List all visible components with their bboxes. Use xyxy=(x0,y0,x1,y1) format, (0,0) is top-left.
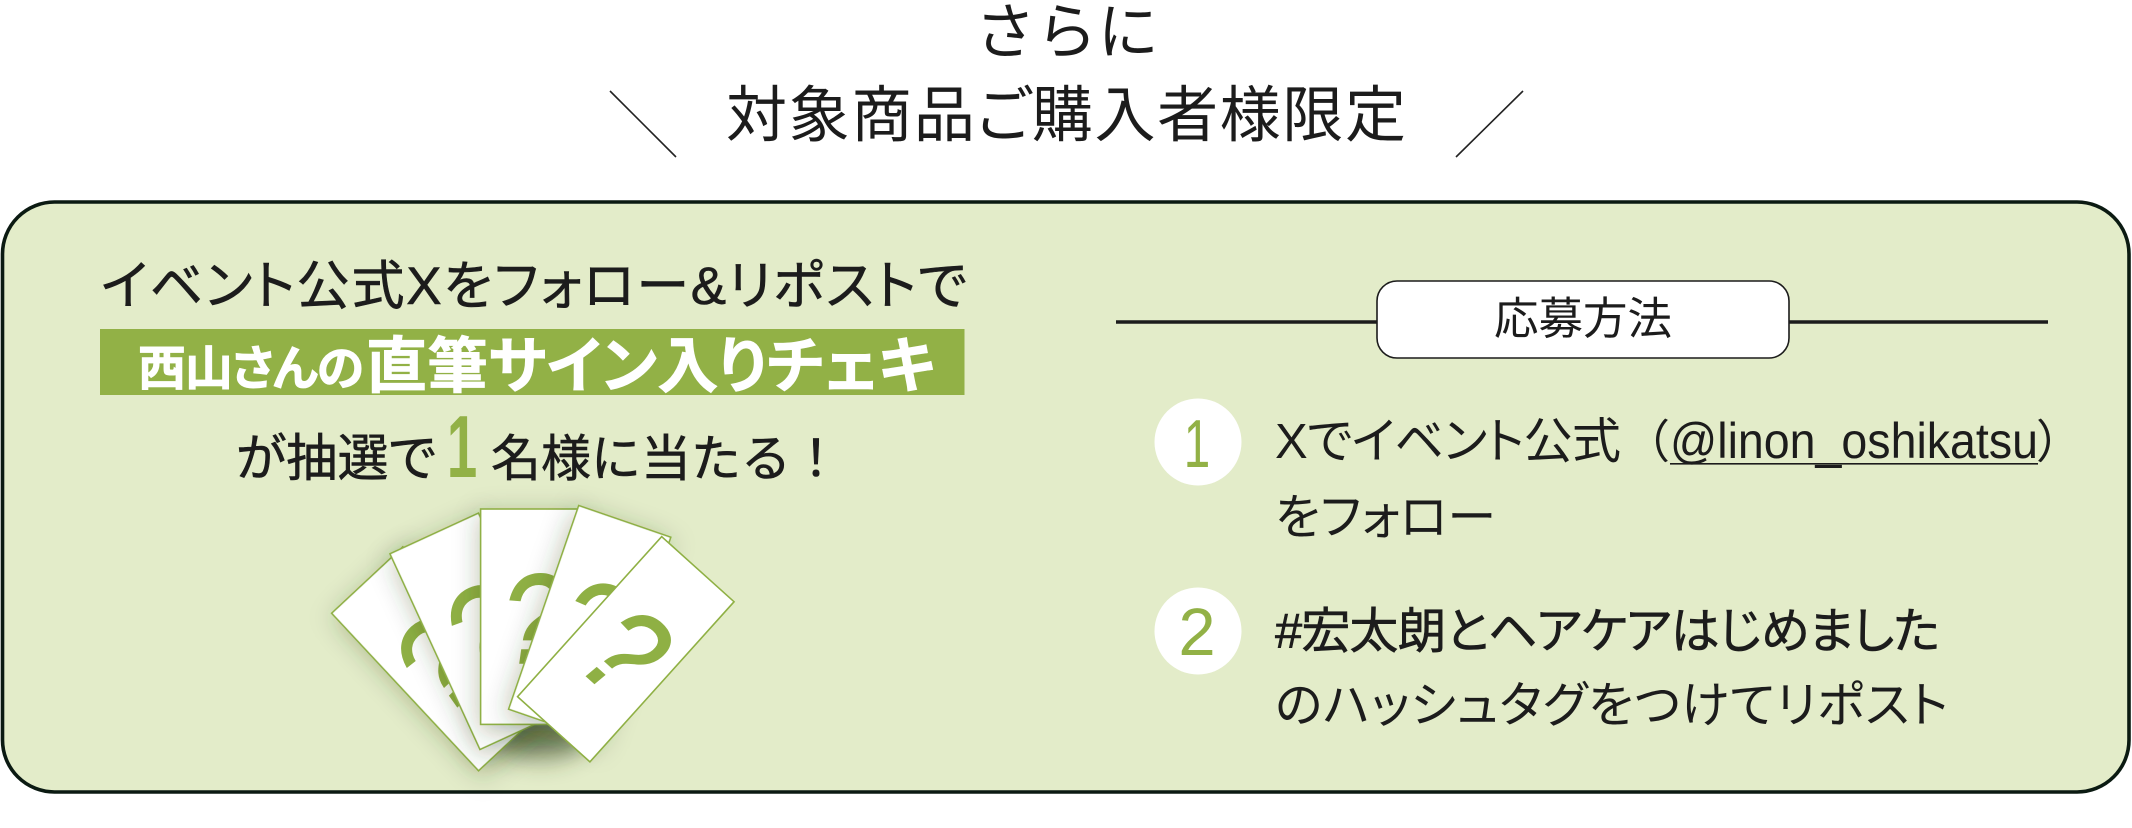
card 4 xyxy=(509,506,671,741)
step 1 number badge xyxy=(1154,398,1242,486)
title: さらに 対象商品ご購入者様限定: さらに xyxy=(975,0,1159,66)
step 1 text: ） xyxy=(2036,416,2082,468)
title: さらに 対象商品ご購入者様限定: 対象商品ご購入者様限定 xyxy=(726,81,1406,149)
card 3: ? xyxy=(493,549,573,691)
text: one winner by lottery: 1 xyxy=(447,398,477,496)
step 1 text xyxy=(1275,413,2082,545)
card 3 xyxy=(481,509,578,724)
title: さらに 対象商品ご購入者様限定 xyxy=(610,0,1523,157)
card 1: ? xyxy=(375,587,500,745)
text: one winner by lottery: が抽選で xyxy=(236,430,436,487)
card 5: ? xyxy=(548,587,702,719)
step 1 text: Xでイベント公式 xyxy=(1275,415,1621,469)
step 1 text: をフォロー xyxy=(1275,491,1496,545)
card 1 xyxy=(332,547,550,771)
step 1 text: @linon_oshikatsu xyxy=(1670,413,2038,469)
card 2 xyxy=(390,513,568,749)
step 2 number badge: 2 xyxy=(1178,595,1216,670)
step 1 text: （ xyxy=(1624,416,1670,468)
step 2 number badge xyxy=(1154,588,1242,674)
card 2: ? xyxy=(434,553,529,715)
step 2 text xyxy=(1275,605,1948,733)
step 2 text: のハッシュタグをつけてリポスト xyxy=(1275,679,1948,733)
banner: signed cheki prize xyxy=(100,329,964,400)
banner: signed cheki prize: 直筆サイン入りチェキ xyxy=(366,332,934,400)
step 1 number badge: 1 xyxy=(1184,407,1210,482)
section header: how to apply xyxy=(1116,281,2048,358)
step 2 text: #宏太朗とヘアケアはじめました xyxy=(1275,605,1940,659)
text: one winner by lottery xyxy=(236,398,841,496)
panel: campaign background xyxy=(2,202,2129,792)
section header: how to apply: 応募方法 xyxy=(1494,295,1672,344)
illustration: fan of mystery cards xyxy=(332,506,734,771)
text: one winner by lottery: 名様に当たる！ xyxy=(491,431,841,487)
card 5 xyxy=(518,537,734,762)
banner: signed cheki prize: 西山さんの xyxy=(138,343,364,396)
heading: campaign condition: イベント公式Xをフォロー&リポストで xyxy=(101,257,967,316)
card 4: ? xyxy=(531,554,652,701)
